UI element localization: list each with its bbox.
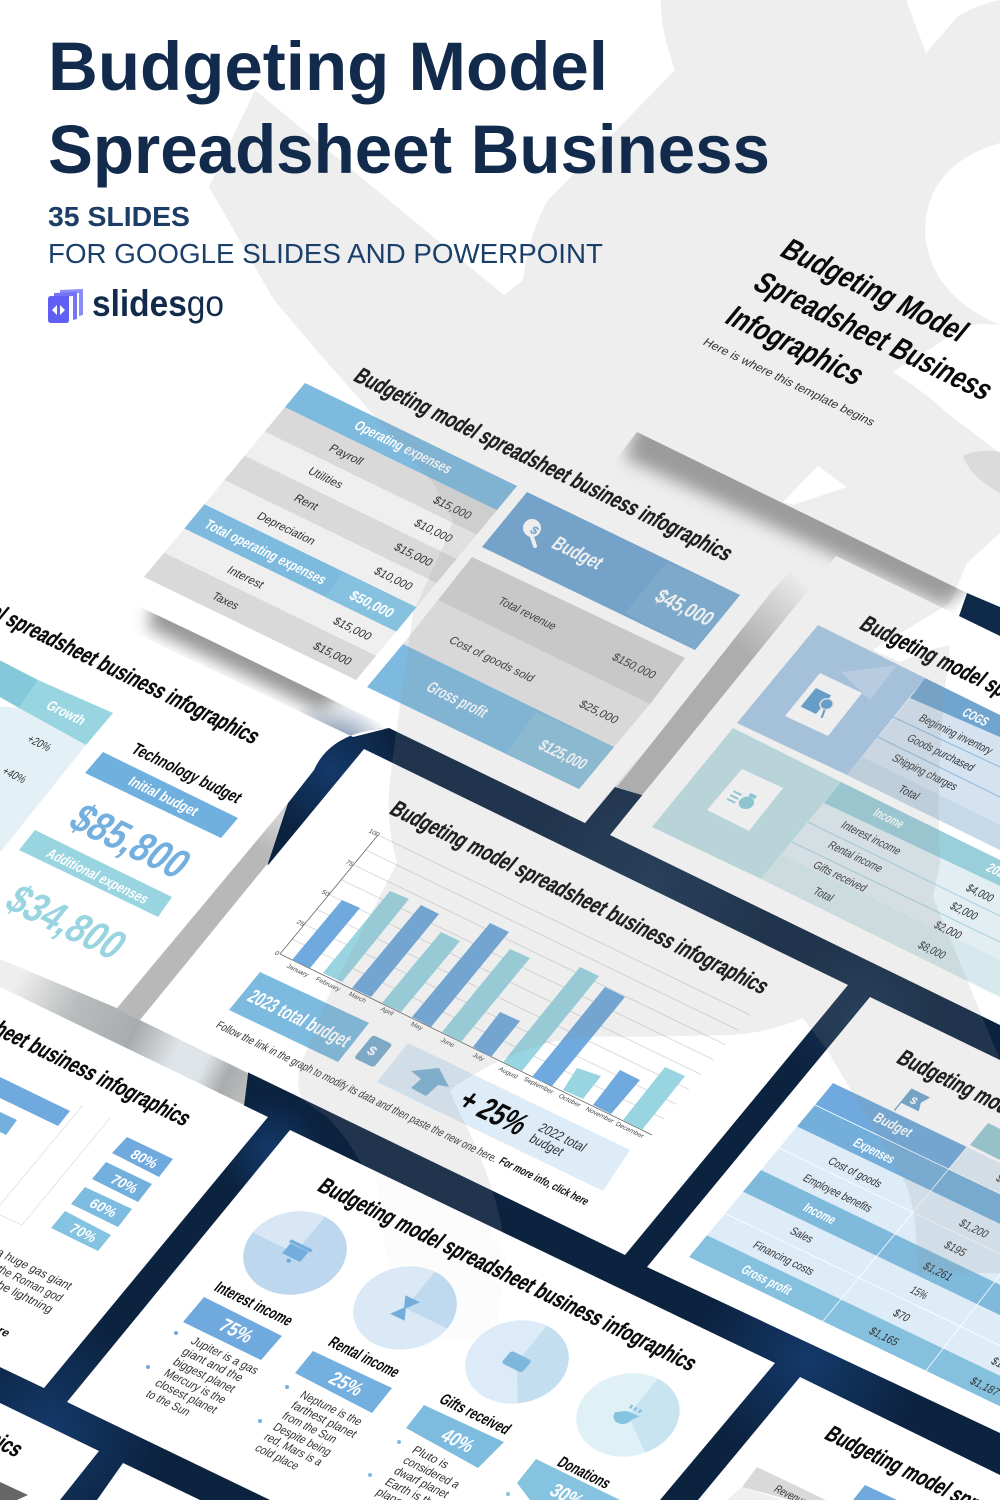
budget header block	[853, 1485, 897, 1500]
bar chart: April	[379, 1006, 395, 1017]
bar chart: February	[314, 976, 342, 993]
budget summary: $25,000	[576, 698, 622, 726]
budget table: Gross profit	[738, 1262, 796, 1298]
budget summary: $125,000	[534, 736, 592, 773]
budget table: Sales	[787, 1225, 817, 1245]
icon: dollar flag	[894, 1089, 930, 1119]
cover slide title: Infographics	[719, 300, 873, 391]
slide: table with operating expenses and budget	[113, 352, 781, 823]
pie: gifts received	[445, 1305, 589, 1419]
operating expenses table: Operating expenses	[350, 418, 456, 477]
chart footnote link: For more info, click here	[496, 1155, 592, 1208]
bar chart: January	[285, 963, 311, 979]
column: interest income: biggest planet	[170, 1356, 239, 1395]
budget table: $1,261	[920, 1260, 956, 1284]
growth callout	[377, 1043, 630, 1191]
dark navy backdrop	[0, 593, 1000, 1500]
technology budget figures: Additional expenses	[42, 846, 152, 907]
column: interest income: Interest income	[210, 1278, 297, 1329]
subtitle: slide count: 35 SLIDES	[48, 201, 190, 232]
title: Spreadsheet Business	[48, 111, 770, 188]
COGS panel	[737, 625, 1000, 850]
percentage labels: 70%	[106, 1172, 142, 1197]
income panel: Income	[870, 805, 908, 831]
budget summary: $45,000	[650, 585, 720, 630]
income panel: Gifts received	[810, 859, 870, 894]
dark table row	[0, 1482, 28, 1500]
bar chart: June	[439, 1037, 456, 1049]
operating expenses table: $15,000	[310, 640, 355, 668]
bar chart: December	[614, 1121, 646, 1140]
column: interest income: closest planet	[152, 1377, 221, 1416]
highlight on COGS panel	[841, 665, 897, 700]
icon: dollar scroll: $	[364, 1043, 381, 1059]
icon: up arrow	[411, 1068, 449, 1096]
income panel: $2,000	[931, 919, 965, 942]
bar chart: July	[471, 1052, 486, 1063]
slide: budget table right	[647, 997, 1000, 1449]
title: Budgeting Model	[48, 28, 608, 105]
operating expenses table: Taxes	[209, 590, 242, 612]
budget table: Financing costs	[750, 1239, 817, 1278]
bar chart: September	[522, 1076, 556, 1096]
budget table	[689, 1083, 1000, 1449]
column: rental income: red, Mars is a	[261, 1431, 326, 1468]
budget table: Cost of goods	[825, 1155, 885, 1190]
column: rental income: 25%	[324, 1368, 368, 1400]
technology budget figures: $34,800	[0, 877, 137, 968]
operating expenses table: Payroll	[326, 442, 366, 468]
slide: COGS and income	[610, 556, 1000, 1025]
slide: technology budget	[0, 547, 389, 1008]
drop shadows between slides	[0, 415, 975, 1105]
growth table	[0, 650, 113, 890]
pie: donations	[556, 1358, 700, 1472]
slide title: Budgeting model spreadsheet business infographics	[384, 797, 775, 999]
column: rental income: Despite being	[270, 1421, 335, 1458]
background silhouette	[209, 0, 1000, 1330]
icon: money bag	[726, 786, 760, 811]
slide: income pies	[67, 1130, 775, 1500]
slide: bar chart	[140, 749, 848, 1255]
faint silhouette on slide	[375, 1171, 507, 1340]
bar chart: 75	[344, 859, 355, 868]
operating expenses table: $15,000	[330, 615, 375, 643]
income panel: $8,000	[915, 939, 949, 962]
budget table: Expenses	[850, 1135, 899, 1166]
COGS panel: Shipping charges	[889, 752, 961, 793]
operating expenses table: Interest	[224, 564, 268, 591]
income panel: Total	[810, 885, 837, 904]
column: donations	[506, 1453, 620, 1500]
2023 total budget label	[229, 972, 369, 1062]
column: gifts received: Gifts received	[435, 1390, 515, 1438]
2023 total budget label: 2023 total budget	[243, 986, 356, 1051]
budget summary	[367, 492, 740, 789]
column: interest income	[143, 1278, 297, 1418]
growth callout: budget	[526, 1131, 568, 1159]
income panel: $2,000	[947, 900, 981, 923]
icon: dollar scroll	[354, 1035, 393, 1068]
column: gifts received: considered a	[400, 1454, 463, 1491]
operating expenses table: $10,000	[411, 517, 456, 545]
percentage labels: 70%	[65, 1221, 101, 1246]
slide title: Budgeting model spreadsheet business infographics	[348, 364, 739, 566]
slide: percentages chart	[0, 929, 268, 1388]
slide: bottom corner partial	[97, 1463, 200, 1500]
cover slide title	[719, 233, 1000, 406]
percentage labels: 80%	[126, 1147, 162, 1172]
budget table: $1,200	[956, 1217, 992, 1241]
technology budget figures: $85,800	[60, 796, 201, 887]
column: rental income: cold place	[252, 1442, 302, 1472]
icon: stacked slides	[48, 289, 83, 323]
cover slide subtitle: Here is where this template begins	[700, 336, 878, 428]
operating expenses table: Utilities	[305, 465, 346, 491]
slide: bottom left partial	[0, 1260, 99, 1500]
pie: interest income	[223, 1196, 367, 1310]
budget table: $1,165	[866, 1325, 902, 1349]
column: rental income: from the Sun	[279, 1410, 340, 1446]
operating expenses table: Rent	[291, 492, 322, 513]
column: interest income: to the Sun	[143, 1388, 193, 1418]
horizontal bars and grid	[0, 1077, 110, 1225]
operating expenses table: Depreciation	[254, 510, 319, 547]
bar chart: 50	[320, 889, 331, 898]
column: interest income: Mercury is the	[161, 1367, 229, 1406]
bar chart	[273, 828, 750, 1140]
budget summary: Cost of goods sold	[446, 634, 538, 685]
COGS panel: Goods purchased	[904, 732, 978, 774]
bar chart: 100	[367, 828, 381, 838]
budget table: Budget	[869, 1110, 916, 1141]
growth table: Growth	[42, 698, 89, 729]
bar chart: 0	[273, 950, 281, 957]
budget table: Income	[800, 1200, 840, 1227]
technology budget figures	[0, 740, 246, 968]
logo: slidesgo: slidesgo	[92, 283, 224, 324]
chart footnote: Follow the link in the graph to modify its data and then paste the new one here.	[213, 1019, 501, 1165]
column: interest income: 75%	[214, 1315, 258, 1347]
bar chart: March	[347, 991, 368, 1005]
icon: dollar flag: $	[907, 1095, 920, 1107]
percentage labels	[51, 1137, 173, 1251]
bar chart: November	[584, 1106, 616, 1125]
budget table: $70	[890, 1307, 914, 1324]
operating expenses table: $15,000	[430, 494, 475, 522]
budget table: $195	[941, 1239, 970, 1259]
budget table: Employee benefits	[800, 1172, 876, 1215]
bar chart: August	[497, 1066, 520, 1080]
body text	[0, 1226, 76, 1340]
operating expenses table	[144, 383, 517, 680]
column: rental income: Rental income	[324, 1333, 404, 1381]
grey blob in silhouette	[963, 451, 1000, 493]
pie: rental income	[333, 1251, 477, 1365]
column: rental income: Neptune is the	[297, 1389, 365, 1428]
income panel: Rental income	[825, 839, 886, 875]
income panel	[652, 728, 1000, 997]
white cut-out in silhouette	[783, 466, 847, 505]
title	[48, 28, 770, 188]
budget summary: Gross profit	[422, 678, 492, 721]
operating expenses table: $15,000	[391, 541, 436, 569]
slide title: Budgeting model spreadsheet business infographics	[312, 1174, 703, 1376]
revenue row	[727, 1467, 830, 1500]
budget summary: Total revenue	[495, 595, 560, 633]
technology budget figures: Initial budget	[124, 774, 202, 819]
icon: magnifier with dollar	[523, 519, 542, 546]
column: gifts received: Pluto is	[409, 1444, 452, 1471]
bar chart: May	[409, 1021, 425, 1032]
budget summary: $150,000	[609, 651, 660, 682]
COGS panel: Total	[895, 783, 923, 802]
column: rental income	[252, 1333, 404, 1472]
column: gifts received	[368, 1390, 515, 1500]
growth callout: 2022 total	[535, 1120, 590, 1154]
bar chart: October	[557, 1093, 583, 1109]
column: gifts received: 40%	[436, 1425, 479, 1457]
budget table: 15%	[907, 1284, 931, 1302]
budget summary: Budget	[547, 533, 608, 574]
income panel: Interest income	[838, 819, 905, 857]
operating expenses table: $50,000	[345, 588, 398, 621]
subtitle: platforms: FOR GOOGLE SLIDES AND POWERPOINT	[48, 238, 603, 269]
operating expenses table: Total operating expenses	[200, 517, 330, 588]
operating expenses table: $10,000	[371, 565, 416, 593]
slide: bottom right revenue	[698, 1377, 1000, 1500]
technology budget figures: Technology budget	[127, 740, 246, 807]
growth table: +20%	[24, 733, 55, 754]
icon: document with magnifier	[800, 688, 838, 718]
bar chart: 25	[295, 919, 306, 928]
growth callout: + 25%	[451, 1083, 536, 1142]
icon: magnifier with dollar: $	[527, 524, 542, 537]
column: rental income: farthest planet	[288, 1399, 360, 1441]
growth table: +40%	[0, 765, 30, 786]
percentage labels: 60%	[85, 1196, 121, 1221]
column: interest income: giant and the	[179, 1345, 247, 1384]
column: interest income: Jupiter is a gas	[188, 1335, 262, 1377]
